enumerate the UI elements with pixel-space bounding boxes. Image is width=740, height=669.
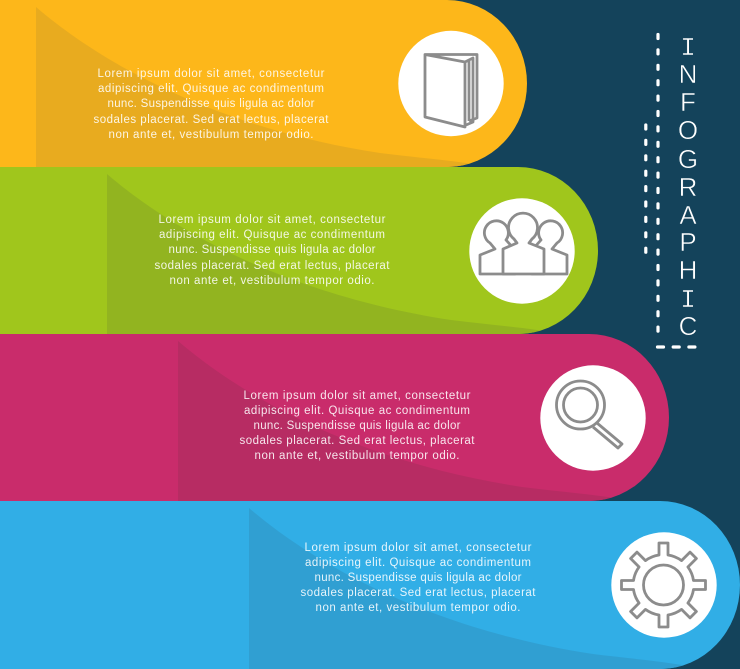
text block: pink: nunc. Suspendisse quis ligula ac dolor [254, 420, 461, 432]
text block: blue [300, 542, 536, 614]
text block: green: nunc. Suspendisse quis ligula ac dolor [168, 244, 376, 256]
title: INFOGRAPHIC [678, 33, 698, 341]
title: INFOGRAPHIC: R [679, 172, 697, 202]
title: INFOGRAPHIC: O [678, 115, 698, 145]
dashed frame [646, 34, 696, 347]
title: INFOGRAPHIC: P [679, 227, 697, 257]
text block: green: non ante et, vestibulum tempor odio. [170, 275, 374, 287]
panel: orange band [0, 0, 527, 167]
text block: orange [94, 68, 329, 141]
text block: blue: nunc. Suspendisse quis ligula ac dolor [314, 572, 522, 584]
text block: pink [240, 390, 475, 462]
panel: pink band [0, 334, 669, 501]
panel: green band [0, 167, 598, 334]
text block: green: Lorem ipsum dolor sit amet, consectetur [158, 214, 386, 226]
text block: orange: adipiscing elit. Quisque ac condimentum [98, 83, 324, 95]
text block: green: sodales placerat. Sed erat lectus, placerat [154, 260, 390, 272]
icon: gear [611, 532, 717, 638]
text block: pink: non ante et, vestibulum tempor odio. [254, 450, 460, 462]
title: INFOGRAPHIC: N [679, 59, 697, 89]
title: INFOGRAPHIC: H [679, 255, 697, 285]
title: INFOGRAPHIC: I [680, 285, 696, 315]
text block: green [154, 214, 390, 287]
text block: pink: adipiscing elit. Quisque ac condimentum [244, 405, 470, 417]
text block: orange: Lorem ipsum dolor sit amet, consectetur [98, 68, 325, 80]
title: INFOGRAPHIC: A [679, 200, 697, 230]
text block: green: adipiscing elit. Quisque ac condimentum [159, 229, 385, 241]
text block: orange: non ante et, vestibulum tempor odio. [108, 129, 314, 141]
icon: magnifying glass [540, 365, 646, 471]
text block: blue: adipiscing elit. Quisque ac condimentum [305, 557, 531, 569]
text block: blue: non ante et, vestibulum tempor odio. [316, 602, 520, 614]
title: INFOGRAPHIC: G [678, 144, 698, 174]
title: INFOGRAPHIC: I [680, 33, 696, 63]
text block: pink: Lorem ipsum dolor sit amet, consectetur [244, 390, 471, 402]
icon: brochure [398, 31, 504, 136]
panel: blue band [0, 501, 740, 669]
text block: orange: sodales placerat. Sed erat lectus, placerat [94, 114, 329, 126]
text block: pink: sodales placerat. Sed erat lectus, placerat [240, 435, 475, 447]
title: INFOGRAPHIC: C [679, 311, 697, 341]
icon: people [469, 198, 575, 304]
text block: blue: sodales placerat. Sed erat lectus, placerat [300, 587, 536, 599]
text block: orange: nunc. Suspendisse quis ligula ac dolor [108, 98, 315, 110]
title: INFOGRAPHIC: F [680, 87, 696, 117]
text block: blue: Lorem ipsum dolor sit amet, consectetur [304, 542, 532, 554]
